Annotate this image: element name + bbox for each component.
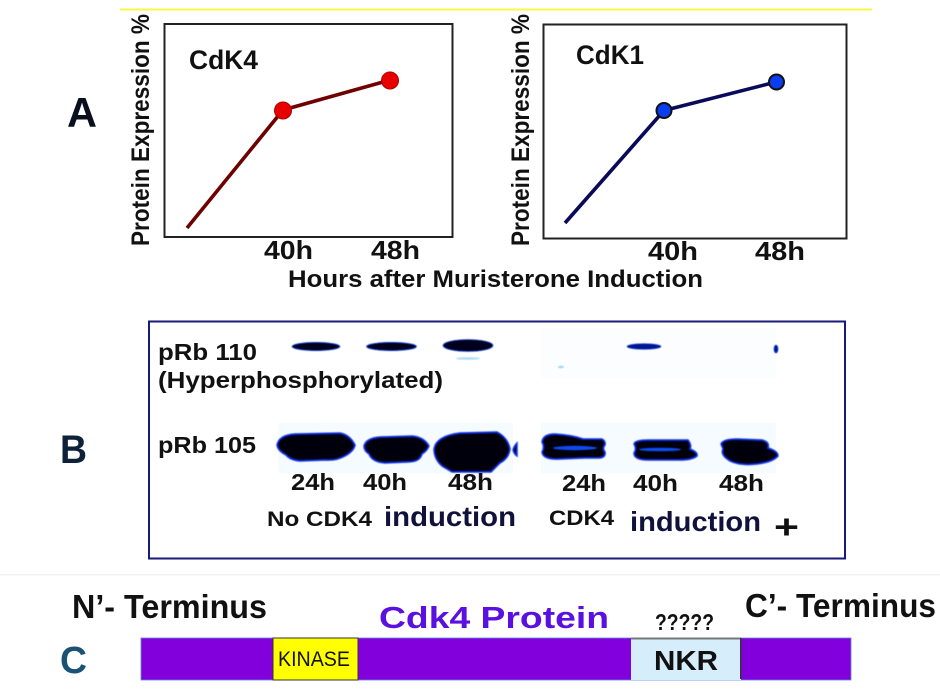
row label: pRb 110: pRb 110 xyxy=(158,339,257,365)
caption: induction right: induction xyxy=(630,506,761,537)
row label: Hyperphosphorylated: (Hyperphosphorylated) xyxy=(158,367,443,393)
caption: CDK4: CDK4 xyxy=(549,507,614,530)
blot background strips xyxy=(278,328,776,473)
chart title: CdK1: CdK1 xyxy=(576,40,644,70)
panel C: protein domain map xyxy=(60,587,936,682)
lane label: CDK4 48h: 48h xyxy=(719,470,764,496)
protein bar xyxy=(141,638,851,680)
caption: induction left: induction xyxy=(384,501,516,532)
chart title: CdK4: CdK4 xyxy=(189,45,258,75)
caption: No CDK4: No CDK4 xyxy=(267,508,372,531)
data point: CdK1 48h xyxy=(769,74,784,90)
lane label: CDK4 40h: 40h xyxy=(633,470,678,496)
N-terminus label: N’- Terminus xyxy=(72,588,267,625)
kinase domain xyxy=(273,638,358,680)
lane label: 40h: 40h xyxy=(363,469,407,495)
kinase domain: KINASE xyxy=(278,648,350,671)
C-terminus label: C’- Terminus xyxy=(745,587,936,624)
question marks: ????? xyxy=(655,609,714,635)
blot frame xyxy=(149,322,845,558)
panel B: western blot xyxy=(149,322,845,558)
lane label: 24h: 24h xyxy=(291,469,335,495)
data point: CdK4 48h xyxy=(382,72,398,89)
NKR domain xyxy=(631,638,742,680)
lane label: 48h: 48h xyxy=(448,469,493,495)
data line: CdK1 xyxy=(565,82,776,223)
shared x axis title: Hours after Muristerone Induction xyxy=(288,266,703,293)
chart frame: CdK1 xyxy=(544,24,846,238)
chart frame: CdK4 xyxy=(164,24,452,237)
data point: CdK1 40h xyxy=(656,103,672,118)
x tick label: CdK1 48h: 48h xyxy=(755,236,805,266)
pRb 105 bands xyxy=(277,432,778,472)
data point: CdK4 40h xyxy=(274,102,292,119)
panel label B: B xyxy=(60,428,87,472)
x tick label: CdK1 40h: 40h xyxy=(648,236,698,266)
x tick label: CdK4 40h: 40h xyxy=(264,235,313,265)
protein title: Cdk4 Protein xyxy=(379,600,609,635)
panel label C: C xyxy=(60,640,87,682)
pRb 110 bands xyxy=(292,340,778,368)
plus sign: + xyxy=(774,508,799,545)
x tick label: CdK4 48h: 48h xyxy=(371,235,420,265)
panel A: CdK1 line chart xyxy=(507,14,846,266)
data line: CdK4 xyxy=(187,80,390,228)
NKR domain: NKR xyxy=(654,645,718,676)
panel A: CdK4 line chart xyxy=(127,14,452,265)
lane label: CDK4 24h: 24h xyxy=(562,470,606,496)
row label: pRb 105: pRb 105 xyxy=(158,432,256,458)
band highlights xyxy=(553,446,681,451)
panel label A: A xyxy=(67,89,97,136)
